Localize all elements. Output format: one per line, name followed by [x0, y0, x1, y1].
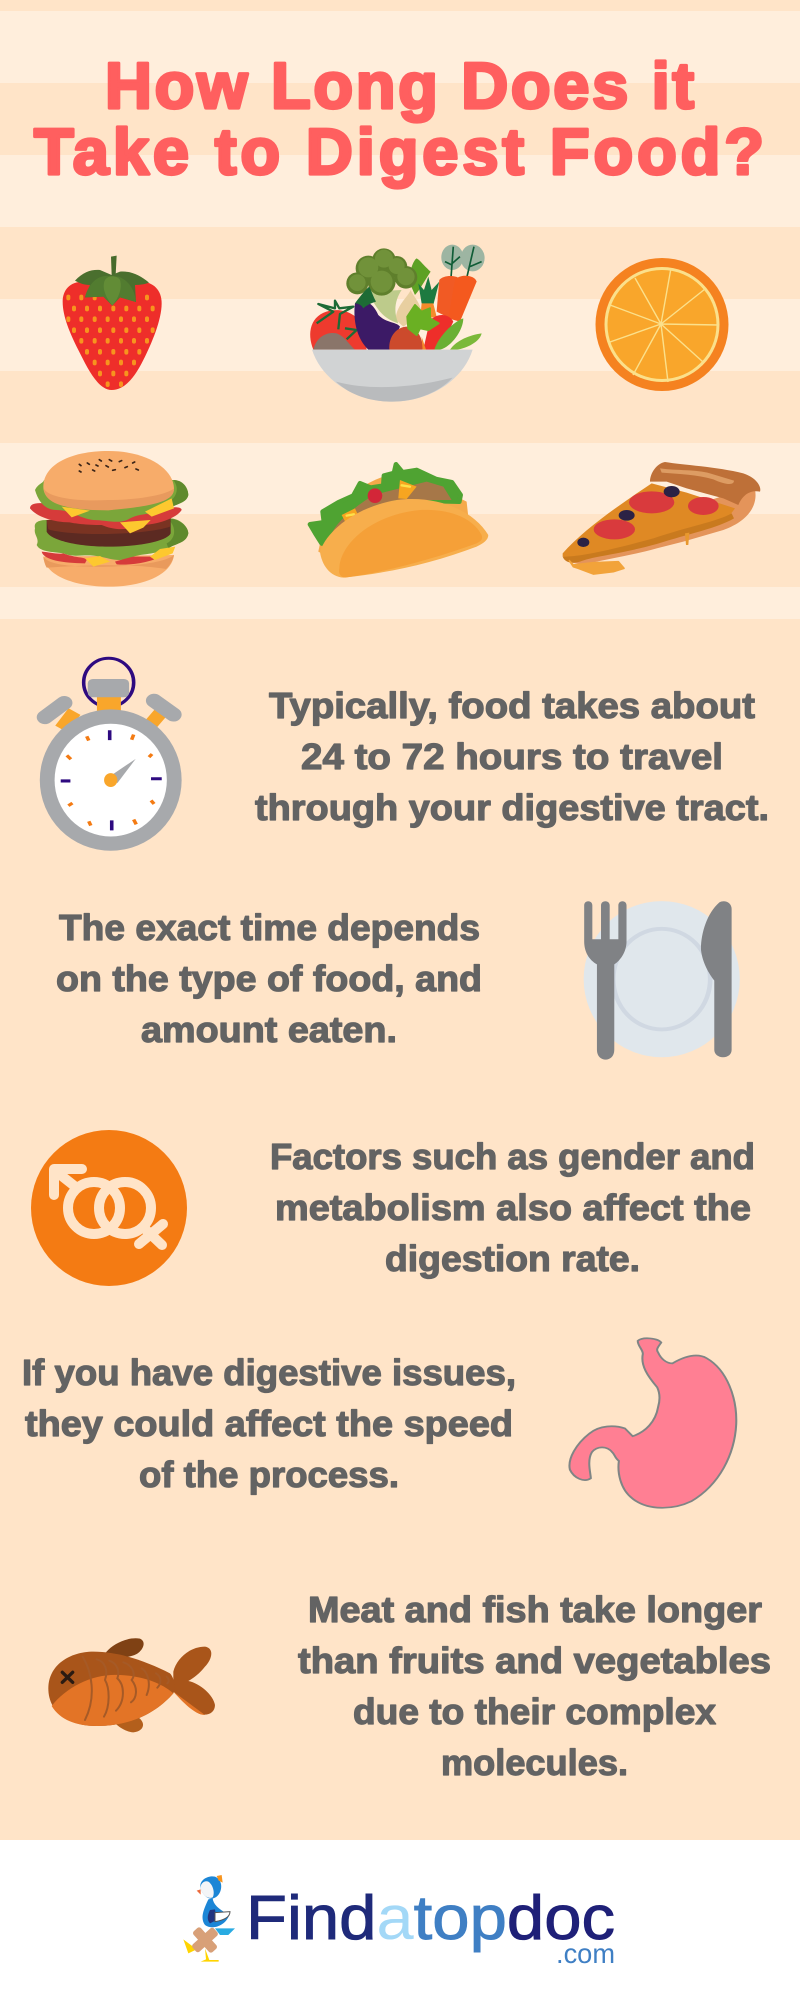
red pepper	[423, 315, 453, 350]
text: type and amount of food: The exact time depends	[59, 907, 480, 948]
text: type and amount of food	[56, 907, 482, 1050]
top bun	[43, 451, 174, 510]
icon: taco	[310, 464, 488, 578]
text: meat and fish: due to their complex	[353, 1691, 716, 1732]
icon: gender symbols	[31, 1130, 187, 1286]
icon: pizza slice	[563, 462, 760, 574]
peas	[434, 318, 463, 350]
spring onion greens	[410, 258, 431, 295]
broccoli florets	[346, 248, 417, 296]
title: Take to Digest Food?	[34, 115, 764, 188]
text: digestive issues: If you have digestive issues,	[22, 1352, 516, 1393]
text: gender and metabolism	[270, 1136, 755, 1279]
carrots	[420, 303, 437, 320]
icon: vegetable bowl	[310, 245, 485, 402]
lower crust	[563, 489, 756, 564]
text: type and amount of food: on the type of food, and	[56, 958, 482, 999]
front shell	[320, 499, 488, 578]
patty	[47, 517, 171, 547]
top crust	[650, 462, 760, 505]
icon: stopwatch	[40, 658, 182, 851]
cheese	[62, 498, 175, 567]
wordmark: Findatopdoc	[246, 1884, 615, 1953]
eggplant	[354, 301, 400, 350]
text: meat and fish: Meat and fish take longer	[308, 1589, 762, 1630]
text: gender and metabolism: Factors such as gender and	[270, 1136, 755, 1177]
parsley	[407, 305, 439, 335]
meat	[328, 482, 452, 545]
broccoli stalk	[368, 290, 402, 323]
icon: strawberry	[63, 256, 162, 390]
wordmark suffix: .com	[556, 1938, 615, 1969]
text: typical digestion time	[255, 685, 769, 828]
icon: orange slice	[596, 258, 728, 391]
icon: stomach	[569, 1338, 736, 1508]
cheese	[563, 483, 735, 557]
carrot tops	[441, 245, 485, 271]
icon: fish	[48, 1638, 215, 1732]
bottom bun	[43, 555, 174, 587]
text: typical digestion time: through your digestive tract.	[255, 787, 769, 828]
text: gender and metabolism: digestion rate.	[385, 1238, 640, 1279]
text: meat and fish: than fruits and vegetables	[298, 1640, 771, 1681]
text: digestive issues: of the process.	[139, 1454, 399, 1495]
icon: plate and cutlery	[584, 901, 740, 1060]
cheese drip	[569, 561, 624, 574]
sesame seeds	[79, 460, 138, 472]
text: typical digestion time: Typically, food takes about	[269, 685, 755, 726]
upper tomato	[30, 503, 182, 529]
text: meat and fish	[298, 1589, 771, 1783]
lower lettuce	[35, 518, 188, 560]
title: How Long Does it	[105, 49, 694, 122]
text: gender and metabolism: metabolism also affect the	[275, 1187, 751, 1228]
text: meat and fish: molecules.	[441, 1742, 628, 1783]
lettuce	[310, 464, 461, 549]
potato	[313, 333, 355, 350]
text: digestive issues: they could affect the speed	[25, 1403, 513, 1444]
bowl	[312, 350, 473, 402]
back shell	[318, 472, 470, 562]
upper lettuce	[35, 480, 188, 522]
text: typical digestion time: 24 to 72 hours to travel	[301, 736, 723, 777]
onion	[396, 290, 422, 327]
tomato	[310, 310, 367, 350]
olives	[664, 486, 680, 497]
icon: duck mascot	[183, 1875, 235, 1962]
title	[34, 49, 764, 188]
logo: Findatopdoc	[183, 1875, 615, 1969]
tomato slices	[629, 491, 674, 513]
beet	[389, 327, 423, 350]
text: type and amount of food: amount eaten.	[141, 1009, 397, 1050]
taco toppings	[368, 488, 382, 503]
text: digestive issues	[22, 1352, 516, 1495]
icon: burger	[30, 451, 188, 587]
lower tomato	[42, 552, 163, 565]
